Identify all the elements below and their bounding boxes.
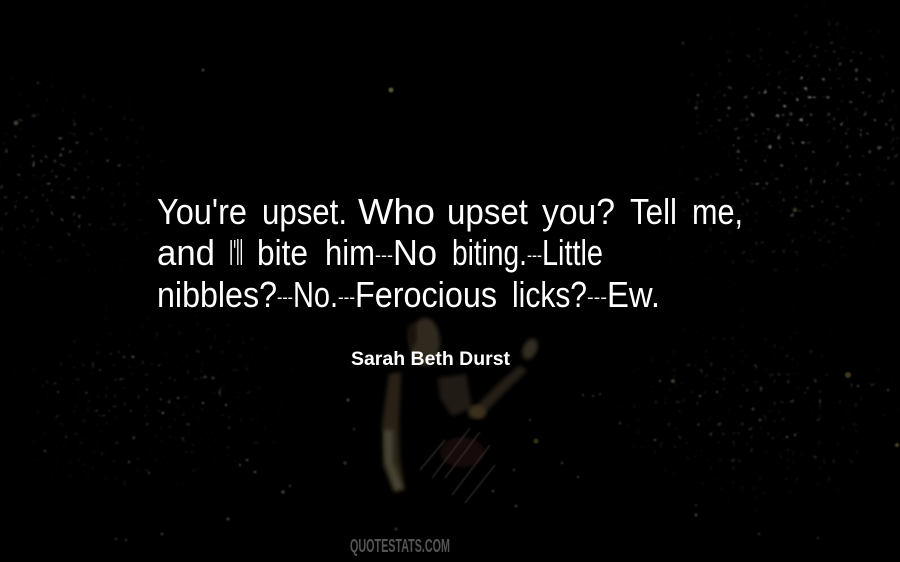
quote line 2: --- — [375, 245, 393, 265]
left arm — [382, 372, 405, 492]
guitar headstock — [519, 336, 541, 362]
quote line 3 — [157, 274, 660, 315]
quote line 2 — [157, 232, 603, 273]
quote line 2: No — [393, 232, 437, 273]
guitar neck — [472, 365, 527, 418]
quote line 1: you? — [542, 191, 615, 232]
quote line 1: me, — [692, 191, 743, 232]
guitar body — [440, 437, 484, 467]
quote line 1: upset — [447, 191, 528, 232]
quote line 2: and — [157, 232, 215, 273]
quote line 2: --- — [527, 245, 542, 265]
quote line 3: --- — [587, 287, 607, 307]
quote line 2: him — [325, 232, 375, 273]
quote line 1: Tell — [630, 191, 677, 232]
quote line 3: licks? — [512, 274, 587, 315]
quote line 1: You're — [157, 191, 247, 232]
watermark: QUOTESTATS.COM — [350, 536, 450, 556]
quote text — [157, 191, 743, 315]
quote line 3: Ferocious — [355, 274, 497, 315]
quote line 1 — [157, 191, 743, 232]
quote line 2: Little — [542, 232, 603, 273]
quote line 3: --- — [338, 287, 355, 307]
chest gear — [438, 374, 472, 416]
quote line 1: upset. — [262, 191, 347, 232]
quote line 3: No. — [293, 274, 338, 315]
guitar hand — [468, 405, 486, 419]
author name: Sarah Beth Durst — [351, 349, 511, 370]
quote line 3: --- — [277, 287, 293, 307]
hair — [407, 323, 417, 347]
quote line 2: bite — [257, 232, 308, 273]
quote line 2: biting. — [452, 232, 527, 273]
musician with guitar — [382, 318, 541, 503]
quote line 3: Ew. — [607, 274, 660, 315]
quote line 1: Who — [358, 191, 435, 232]
guitar strings — [420, 428, 495, 503]
head — [410, 318, 440, 366]
quote line 2: I'll — [229, 232, 243, 273]
quote line 3: nibbles? — [157, 274, 277, 315]
